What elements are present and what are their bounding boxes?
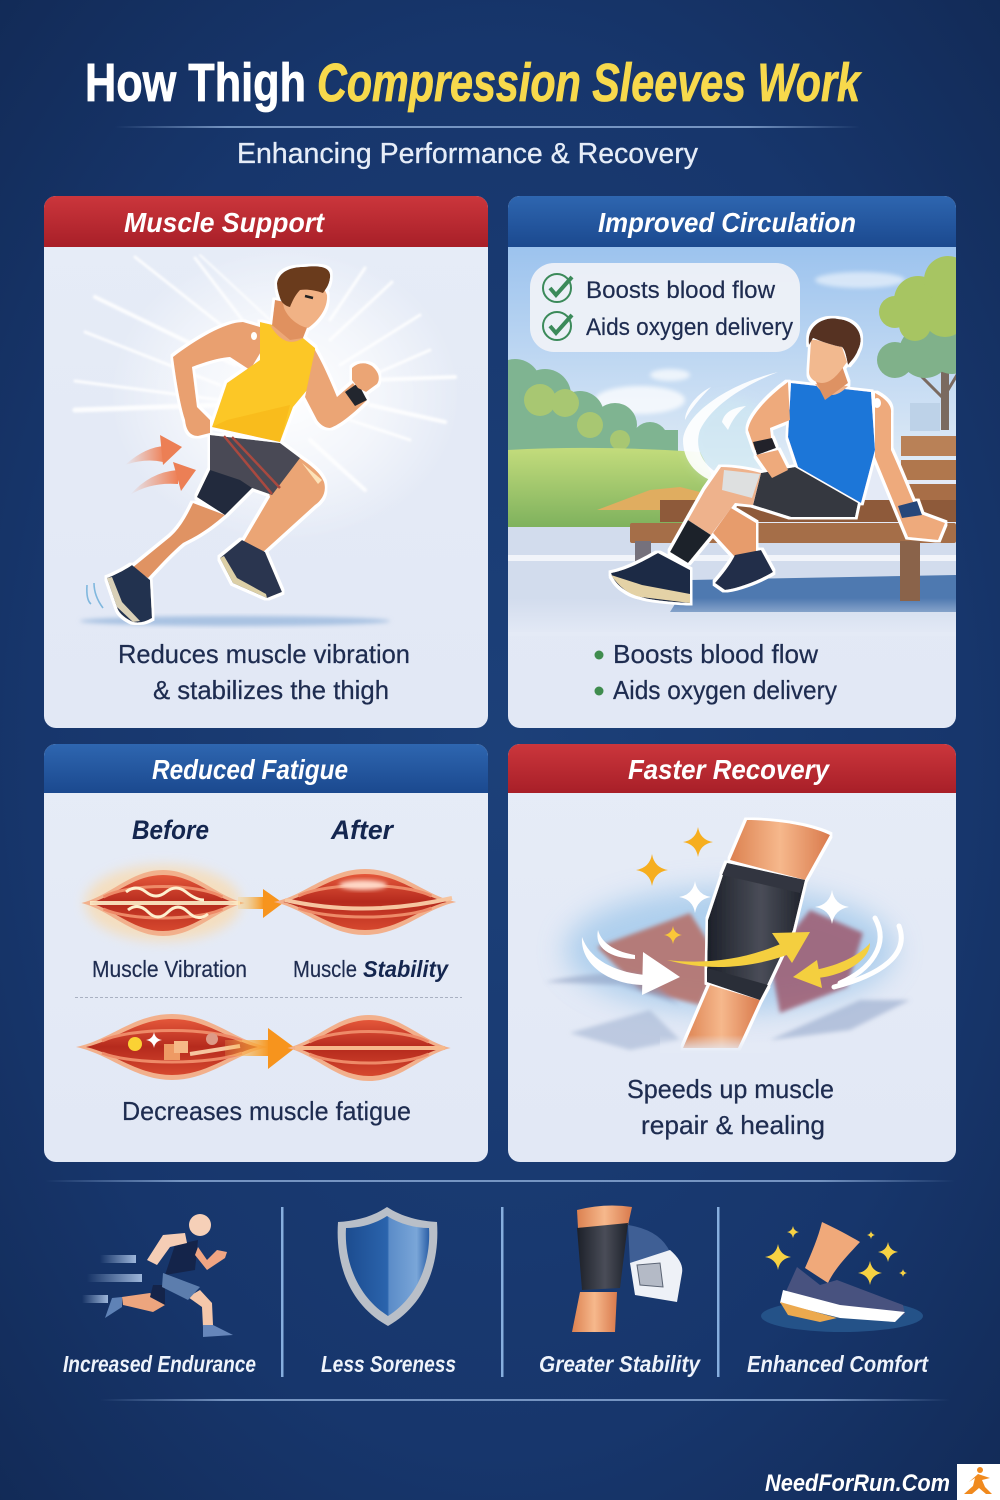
arrow: white left [582, 930, 680, 995]
logo: orange runner [957, 1464, 1000, 1500]
front shoe [611, 553, 690, 603]
label: muscle stability: Stability [363, 956, 449, 982]
icon: running figure [82, 1214, 233, 1337]
caption: muscle support: Reduces muscle vibration [118, 639, 410, 669]
label: before: Before [132, 815, 209, 845]
seated man [611, 318, 945, 603]
torso [788, 383, 875, 503]
label: after: After [330, 815, 394, 845]
callout: benefits: Aids oxygen delivery [586, 314, 794, 341]
callout: benefits: Boosts blood flow [586, 277, 775, 304]
bushes [508, 359, 678, 451]
circulation swirl [683, 372, 778, 482]
back shoe [715, 550, 773, 590]
caption: circulation [594, 639, 837, 705]
arrows [125, 435, 196, 495]
front leg [243, 458, 325, 553]
caption: circulation: Boosts blood flow [613, 639, 818, 669]
panel: muscle support [44, 196, 488, 728]
header: faster recovery [508, 744, 956, 793]
benefit: enhanced comfort [747, 1222, 929, 1377]
header: muscle support: Muscle Support [124, 207, 326, 238]
caption: recovery: Speeds up muscle [627, 1074, 834, 1104]
shorts [753, 467, 858, 517]
benefit: less soreness [321, 1207, 456, 1377]
callout: benefits [530, 263, 800, 352]
panel: faster recovery [508, 744, 956, 1162]
benefit: greater stability [539, 1206, 701, 1377]
front shoe [220, 540, 282, 598]
title [85, 53, 862, 113]
illustration: runner [75, 245, 460, 626]
panel: reduced fatigue [44, 744, 488, 1162]
back leg [132, 503, 225, 578]
leg [683, 820, 830, 1048]
muscle: after [274, 869, 456, 935]
label: muscle vibration: Muscle Vibration [92, 956, 247, 982]
header: improved circulation: Improved Circulation [598, 207, 856, 238]
back leg [713, 508, 756, 557]
arcs: white right [834, 918, 901, 987]
wristband [345, 383, 367, 406]
header: improved circulation [508, 196, 956, 247]
caption: recovery: repair & healing [641, 1110, 825, 1140]
icon: shoe with sparkles [761, 1222, 923, 1332]
illustration: thigh sleeve [545, 820, 910, 1053]
back arm [173, 322, 262, 436]
face [809, 340, 847, 383]
subtitle: Enhancing Performance & Recovery [237, 138, 698, 170]
fist [352, 363, 379, 392]
header: faster recovery: Faster Recovery [628, 754, 830, 785]
muscle: recovered [287, 1015, 451, 1081]
back shoe [107, 565, 152, 622]
brand: NeedForRun.Com [765, 1464, 1000, 1500]
benefit: enhanced comfort: Enhanced Comfort [747, 1351, 929, 1377]
benefit: increased endurance: Increased Endurance [63, 1351, 256, 1377]
head [283, 290, 330, 330]
icon: sparkles [636, 827, 849, 944]
muscle: before [81, 865, 245, 941]
header: muscle support [44, 196, 488, 247]
header: reduced fatigue [44, 744, 488, 793]
near arm [748, 382, 790, 450]
header: reduced fatigue: Reduced Fatigue [152, 754, 348, 785]
icon: shield [338, 1207, 437, 1326]
neck [815, 363, 848, 400]
caption: muscle support: & stabilizes the thigh [153, 675, 389, 705]
front leg [688, 467, 761, 535]
benefit: greater stability: Greater Stability [539, 1351, 701, 1377]
caption: muscle support [118, 639, 410, 705]
benefit: increased endurance [63, 1214, 256, 1377]
torso [212, 322, 315, 442]
brand: NeedForRun.Com: NeedForRun.Com [765, 1470, 950, 1497]
icon: sleeve with pad [572, 1206, 682, 1332]
label: muscle stability [293, 956, 449, 982]
icon: check [543, 274, 572, 302]
panel: improved circulation [489, 196, 976, 728]
caption: recovery [627, 1074, 834, 1140]
shadow [80, 616, 390, 626]
bench [630, 436, 956, 601]
neck [272, 300, 310, 340]
title: How Thigh [85, 53, 306, 113]
arrow: yellow sweep [667, 932, 810, 967]
muscle: fatigued [76, 1014, 268, 1080]
caption: fatigue: Decreases muscle fatigue [122, 1096, 411, 1126]
arrow: before to after [238, 889, 283, 918]
park scene [508, 247, 956, 616]
front arm [305, 350, 367, 428]
sleeve [670, 520, 711, 563]
icon: check [543, 312, 572, 340]
arrow: yellow left [793, 943, 870, 988]
far arm [875, 393, 945, 540]
benefit: less soreness: Less Soreness [321, 1351, 456, 1377]
hair [809, 318, 861, 365]
label: muscle stability: Muscle [293, 956, 357, 982]
arrow: fatigue reduced [225, 1028, 295, 1069]
shorts [197, 435, 300, 515]
caption: circulation: Aids oxygen delivery [613, 675, 837, 705]
